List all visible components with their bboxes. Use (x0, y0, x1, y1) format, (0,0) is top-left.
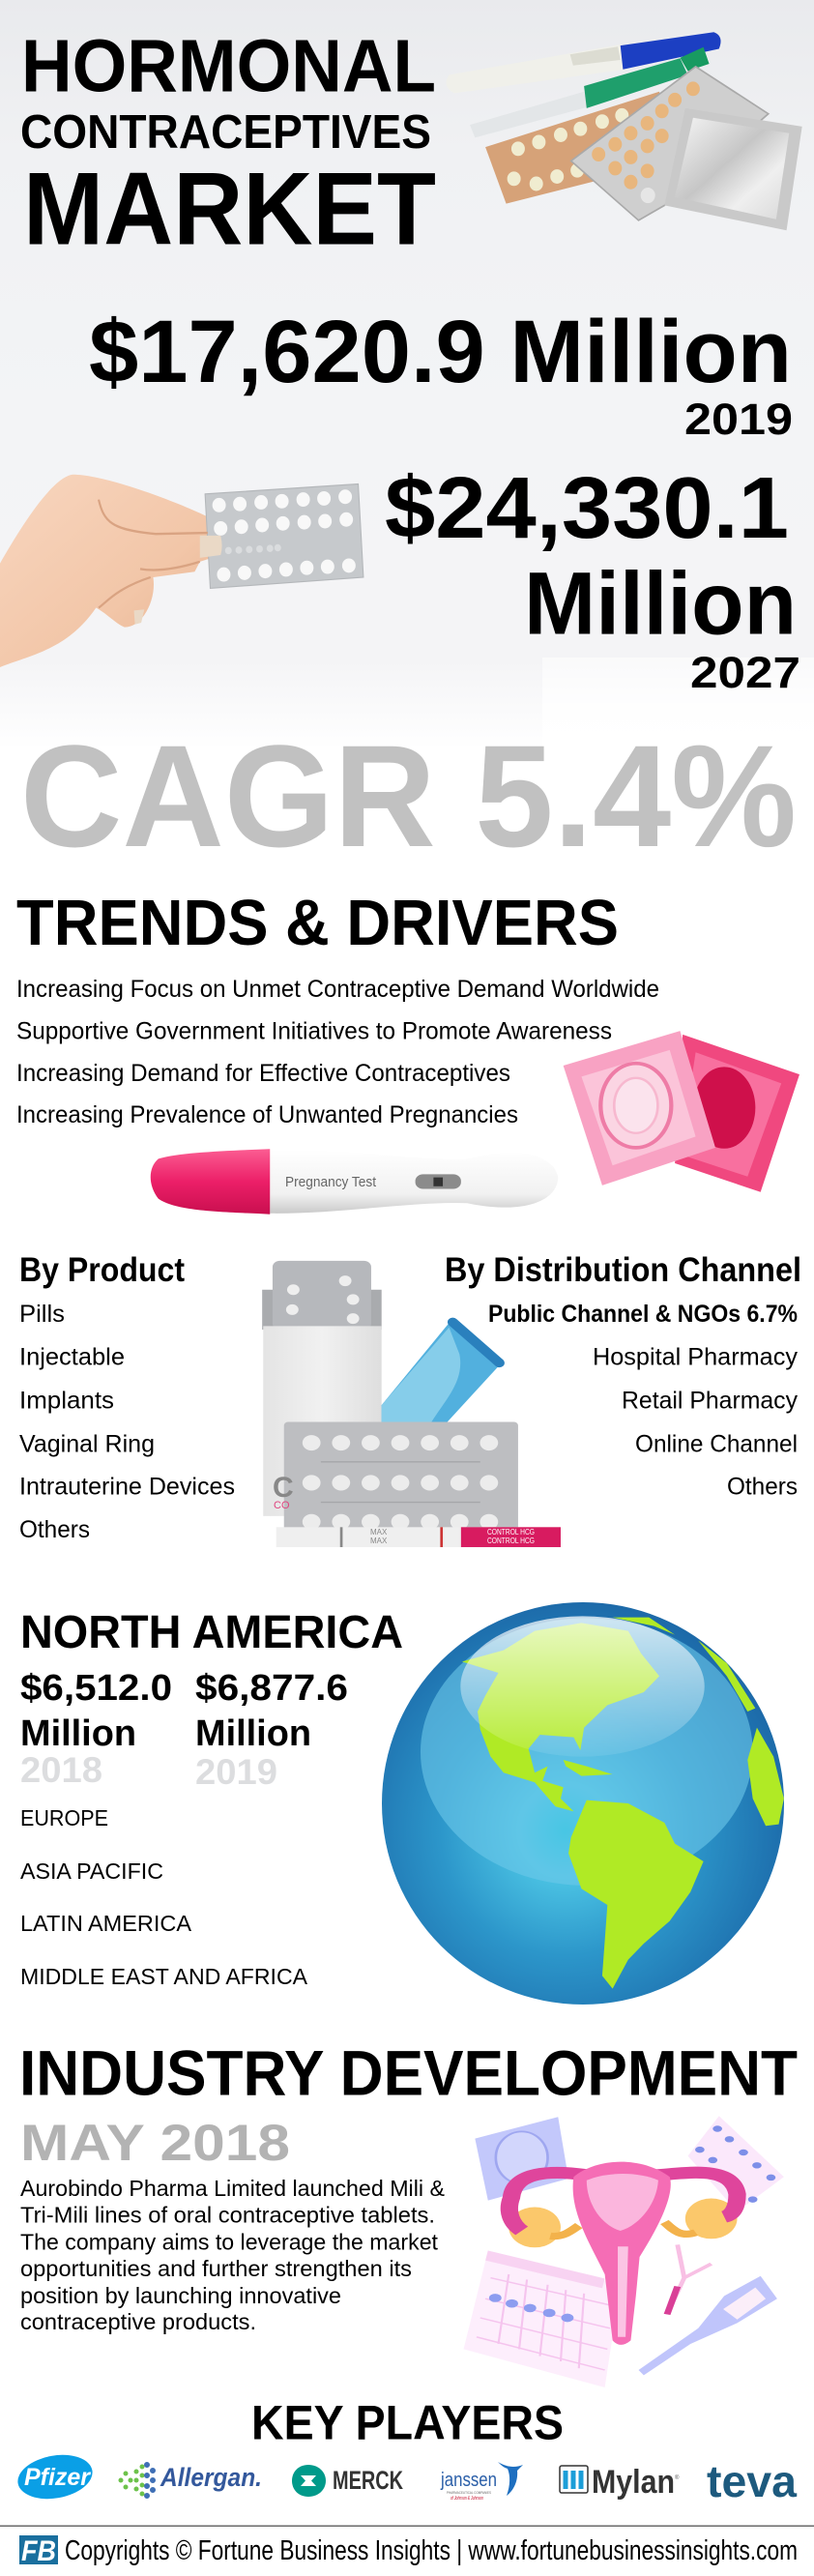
logo: Teva: teva (707, 2456, 797, 2506)
image: hand holding pill blister (0, 475, 363, 667)
panel: north america (20, 1607, 403, 1792)
text block: development: position by launching innovative (20, 2283, 341, 2308)
panel: north america: Million (20, 1713, 136, 1754)
list: other regions: ASIA PACIFIC (20, 1859, 163, 1884)
text block: development (20, 2176, 445, 2334)
list: trends: Increasing Focus on Unmet Contraceptive Demand Worldwide (16, 976, 659, 1003)
list: trends: Increasing Demand for Effective Contraceptives (16, 1060, 510, 1087)
list: trends: Increasing Prevalence of Unwanted Pregnancies (16, 1101, 518, 1128)
list: trends: Supportive Government Initiatives to Promote Awareness (16, 1017, 612, 1044)
logo: Pfizer (15, 2449, 96, 2504)
market value 2027: Million (524, 555, 797, 654)
CAGR: CAGR 5.4% (20, 715, 797, 877)
panel: by distribution channel (445, 1251, 801, 1501)
logo: Merck: MERCK (333, 2466, 403, 2495)
list: trends (16, 976, 659, 1128)
logo: Janssen (440, 2462, 523, 2502)
panel: north america: $6,877.6 (195, 1668, 348, 1709)
market value 2027 (385, 460, 800, 697)
logo: Allergan: Allergan. (160, 2463, 262, 2492)
market value 2019 (89, 303, 793, 444)
panel: north america: 2019 (195, 1752, 277, 1792)
title: MARKET (23, 151, 436, 267)
logo: Mylan: Mylan (592, 2464, 675, 2501)
logo: Janssen: PHARMACEUTICAL COMPANIES (447, 2490, 491, 2495)
panel: by product (19, 1251, 235, 1543)
image: pregnancy test (151, 1149, 558, 1215)
title: CONTRACEPTIVES (20, 106, 431, 159)
heading: trends and drivers: TRENDS & DRIVERS (16, 887, 619, 959)
panel: by product: Implants (19, 1387, 114, 1414)
panel: by product: By Product (19, 1251, 185, 1289)
list: other regions: MIDDLE EAST AND AFRICA (20, 1964, 308, 1989)
panel: north america: 2018 (20, 1750, 102, 1790)
panel: by distribution channel: Public Channel & NGOs 6.7% (488, 1301, 798, 1328)
text block: development: The company aims to leverage the market (20, 2230, 439, 2255)
title: HORMONAL (21, 25, 436, 108)
date: MAY 2018 (20, 2115, 290, 2172)
text block: development: Tri-Mili lines of oral contraceptive tablets. (20, 2203, 435, 2228)
heading: key players: KEY PLAYERS (251, 2396, 564, 2450)
logo: Merck (292, 2465, 403, 2497)
image: contraceptive pack, condom, blister and test strip: CONTROL HCG (487, 1528, 535, 1537)
list: other regions: LATIN AMERICA (20, 1911, 192, 1936)
text block: development: opportunities and further strengthen its (20, 2256, 412, 2281)
market value 2027: $24,330.1 (385, 460, 789, 557)
image: contraceptive pack, condom, blister and test strip: MAX (370, 1528, 388, 1537)
image: contraceptive pack, condom, blister and test strip: C (273, 1472, 294, 1504)
logo: Pfizer: Pfizer (24, 2464, 91, 2491)
panel: by product: Vaginal Ring (19, 1431, 155, 1458)
image: contraceptive pack, condom, blister and test strip: CO (274, 1500, 290, 1511)
image: globe (382, 1602, 784, 2005)
image: pregnancy test: Pregnancy Test (285, 1174, 377, 1190)
image: contraceptive pack, condom, blister and test strip: CONTROL HCG (487, 1537, 535, 1545)
panel: by product: Pills (19, 1301, 65, 1328)
panel: north america: Million (195, 1713, 311, 1754)
logo: Fortune Business Insights: FB (21, 2535, 56, 2567)
image: contraceptive pack, condom, blister and test strip (262, 1261, 561, 1547)
image: reproductive system and contraceptives (464, 2116, 784, 2387)
text block: development: contraceptive products. (20, 2309, 256, 2334)
market value 2027: 2027 (690, 648, 800, 697)
title (20, 25, 436, 267)
list: other regions: EUROPE (20, 1805, 108, 1830)
logo: Janssen: janssen (440, 2470, 497, 2491)
market value 2019: 2019 (684, 395, 793, 444)
panel: north america: $6,512.0 (20, 1668, 172, 1709)
image: contraceptive products (446, 32, 802, 230)
logo: Janssen: of Johnson & Johnson (451, 2496, 483, 2502)
image: pink condoms (564, 1031, 799, 1192)
market value 2019: $17,620.9 Million (89, 303, 792, 401)
image: contraceptive pack, condom, blister and test strip: MAX (370, 1537, 388, 1545)
panel: by distribution channel: Online Channel (635, 1431, 798, 1458)
list: other regions (20, 1805, 308, 1989)
panel: north america: NORTH AMERICA (20, 1607, 403, 1658)
logo: Allergan (121, 2463, 262, 2496)
panel: by product: Injectable (19, 1344, 125, 1371)
panel: by distribution channel: Retail Pharmacy (622, 1387, 798, 1414)
logo: Mylan: ® (675, 2474, 680, 2481)
panel: by product: Others (19, 1516, 90, 1543)
text block: development: Aurobindo Pharma Limited launched Mili & (20, 2176, 445, 2201)
panel: by distribution channel: Hospital Pharmacy (593, 1344, 798, 1371)
panel: by product: Intrauterine Devices (19, 1474, 235, 1501)
panel: by distribution channel: Others (727, 1474, 798, 1501)
